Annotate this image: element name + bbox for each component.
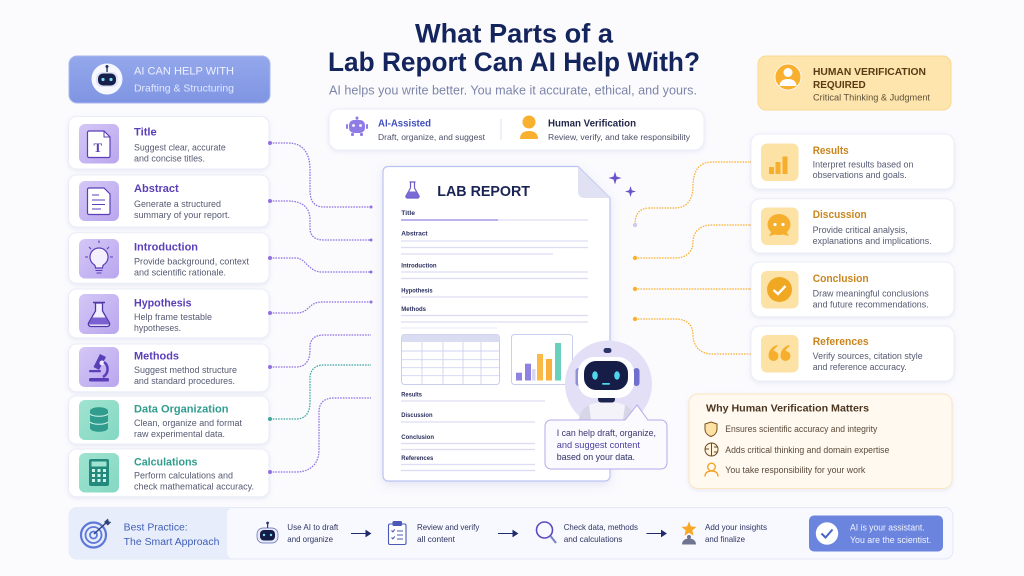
panel: why human verification matters: Ensures scientific accuracy and integrity xyxy=(725,424,878,434)
panel: Methods card: Methods xyxy=(134,351,179,363)
speech bubble: I can help draft, organize, xyxy=(557,428,656,438)
panel: Abstract card: Abstract xyxy=(134,183,179,195)
icon: report flask xyxy=(406,182,419,198)
panel: AI can help header: AI CAN HELP WITH xyxy=(134,66,234,78)
connectors: left cards to report xyxy=(268,141,372,474)
report section labels: References xyxy=(401,455,434,462)
panel: Hypothesis card: Hypothesis xyxy=(134,297,192,309)
panel: why human verification matters: Adds critical thinking and domain expertise xyxy=(725,445,889,455)
report table xyxy=(402,334,500,384)
icon: sparkles xyxy=(608,172,636,197)
panel: Abstract card: Generate a structured xyxy=(134,199,221,209)
icon: check circle xyxy=(761,271,798,308)
icon: title document: T xyxy=(94,140,102,155)
legend: AI-Assisted: Draft, organize, and suggest xyxy=(378,132,486,142)
panel: Calculations card: check mathematical accuracy. xyxy=(134,482,254,492)
icon: abstract document xyxy=(79,181,119,221)
panel: why human verification matters xyxy=(689,394,952,488)
panel: Introduction card: Introduction xyxy=(134,241,198,253)
panel: best practice band: and finalize xyxy=(705,534,745,544)
icon: human xyxy=(520,116,538,139)
panel: best practice band: Review and verify xyxy=(417,522,480,532)
report section labels: Methods xyxy=(401,306,426,313)
report section labels: Results xyxy=(401,392,422,398)
panel: Introduction card: and scientific rationale. xyxy=(134,268,226,278)
panel: Title card: Suggest clear, accurate xyxy=(134,142,226,152)
panel: Hypothesis card: hypotheses. xyxy=(134,323,181,333)
panel: lab report document xyxy=(383,166,610,481)
panel: Title card: and concise titles. xyxy=(134,153,205,163)
panel: best practice band: Add your insights xyxy=(705,522,767,532)
panel: Introduction card: Provide background, context xyxy=(134,257,250,267)
panel: human verification header: REQUIRED xyxy=(813,79,866,91)
report section labels: Discussion xyxy=(401,412,433,419)
panel: Data Organization card: Clean, organize and format xyxy=(134,418,243,428)
panel: Title card xyxy=(68,116,269,169)
panel: best practice band: and calculations xyxy=(564,534,622,544)
title xyxy=(328,18,700,77)
icon: microscope xyxy=(79,347,119,387)
panel: Calculations card: Perform calculations and xyxy=(134,471,233,481)
panel: AI can help header xyxy=(69,56,270,103)
panel: Abstract card xyxy=(68,175,269,227)
arrow xyxy=(646,530,666,536)
panel: Data Organization card: raw experimental data. xyxy=(134,429,225,439)
panel: References card: Verify sources, citation style xyxy=(813,351,923,361)
report section labels: Title xyxy=(401,210,415,217)
legend: AI-Assisted: AI-Assisted xyxy=(378,118,431,130)
panel: References card: References xyxy=(813,336,869,348)
panel: human verification header: HUMAN VERIFICATION xyxy=(813,66,926,78)
icon: shield xyxy=(705,422,717,436)
panel: Hypothesis card xyxy=(68,289,269,338)
arrow xyxy=(351,530,370,536)
panel: Calculations card xyxy=(68,449,269,497)
panel: Data Organization card: Data Organization xyxy=(134,404,229,416)
icon: title document xyxy=(79,124,119,164)
title: Lab Report Can AI Help With? xyxy=(328,47,700,77)
icon: brain xyxy=(705,443,718,456)
panel: Calculations card: Calculations xyxy=(134,456,198,468)
panel: Results card xyxy=(751,134,954,189)
panel: Discussion card xyxy=(751,199,954,253)
panel: Abstract card: summary of your report. xyxy=(134,210,230,220)
panel: Methods card: Suggest method structure xyxy=(134,365,237,375)
panel: best practice band: and organize xyxy=(287,534,333,544)
icon: star and person xyxy=(682,522,696,544)
panel: Discussion card: Discussion xyxy=(813,209,867,221)
panel: Data Organization card xyxy=(68,396,269,444)
speech bubble xyxy=(545,405,667,469)
report section labels: Hypothesis xyxy=(401,288,433,294)
panel: human verification header: Critical Thinking & Judgment xyxy=(813,93,931,103)
panel: Conclusion card xyxy=(751,262,954,317)
panel: Results card: Interpret results based on xyxy=(813,160,913,170)
legend pill xyxy=(329,109,704,150)
icon: flask xyxy=(79,294,119,334)
panel: Discussion card: explanations and implications. xyxy=(813,236,932,246)
panel: References card: and reference accuracy. xyxy=(813,362,907,372)
panel: why human verification matters: You take responsibility for your work xyxy=(725,465,866,475)
icon: quotes xyxy=(761,335,798,372)
report section labels xyxy=(401,210,437,462)
connectors: report to right cards xyxy=(633,160,754,356)
report bar chart xyxy=(512,334,572,384)
report heading: LAB REPORT xyxy=(437,183,530,200)
arrow xyxy=(498,530,518,536)
panel: Introduction card xyxy=(68,233,269,283)
icon: person outline xyxy=(705,463,718,476)
panel: Results card: observations and goals. xyxy=(813,170,907,180)
panel: best practice band: The Smart Approach xyxy=(124,537,219,548)
callout: AI is your assistant xyxy=(809,516,943,552)
legend: Human Verification: Review, verify, and take responsibility xyxy=(548,132,691,142)
icon: calculator xyxy=(79,453,119,492)
panel: References card xyxy=(751,326,954,381)
panel: Hypothesis card: Help frame testable xyxy=(134,312,212,322)
panel: Conclusion card: and future recommendations. xyxy=(813,300,929,310)
icon: chat bubble xyxy=(761,208,798,245)
panel: Results card: Results xyxy=(813,145,849,157)
speech bubble: and suggest content xyxy=(557,440,640,450)
panel: why human verification matters: Why Human Verification Matters xyxy=(706,402,869,414)
panel: Methods card: and standard procedures. xyxy=(134,376,235,386)
icon: bars xyxy=(761,144,798,181)
panel: best practice band: Use AI to draft xyxy=(287,522,339,532)
report section labels: Introduction xyxy=(401,262,437,270)
icon: robot in circle xyxy=(92,64,122,94)
legend: AI-Assisted xyxy=(378,118,486,142)
icon: robot xyxy=(257,522,278,543)
icon: database xyxy=(79,400,119,440)
legend: Human Verification xyxy=(548,118,691,142)
panel: human verification header xyxy=(758,56,951,110)
panel: AI can help header: Drafting & Structuring xyxy=(134,84,234,94)
icon: target xyxy=(81,518,111,548)
icon: person in circle xyxy=(775,64,801,90)
panel: Title card: Title xyxy=(134,126,157,138)
panel: best practice band: all content xyxy=(417,534,456,544)
speech bubble: based on your data. xyxy=(557,452,635,462)
panel: best practice band: Check data, methods xyxy=(564,522,638,532)
icon: magnifier xyxy=(536,522,556,543)
panel: Methods card xyxy=(68,344,269,392)
title: What Parts of a xyxy=(415,18,614,48)
panel: Discussion card: Provide critical analysis, xyxy=(813,225,908,235)
panel: Conclusion card: Draw meaningful conclusions xyxy=(813,288,929,298)
icon: light bulb xyxy=(79,239,119,278)
report section labels: Abstract xyxy=(401,230,428,238)
icon: clipboard xyxy=(388,522,406,544)
panel: best practice band: Best Practice: xyxy=(124,522,188,534)
legend: Human Verification: Human Verification xyxy=(548,118,636,130)
icon: AI robot xyxy=(346,116,368,136)
panel: Conclusion card: Conclusion xyxy=(813,273,869,285)
panel: best practice band xyxy=(69,508,953,559)
callout: AI is your assistant: AI is your assistant. xyxy=(850,523,925,533)
callout: AI is your assistant: You are the scientist. xyxy=(850,535,931,545)
robot assistant xyxy=(565,340,652,428)
subtitle: AI helps you write better. You make it accurate, ethical, and yours. xyxy=(329,84,697,98)
report section labels: Conclusion xyxy=(401,434,434,441)
